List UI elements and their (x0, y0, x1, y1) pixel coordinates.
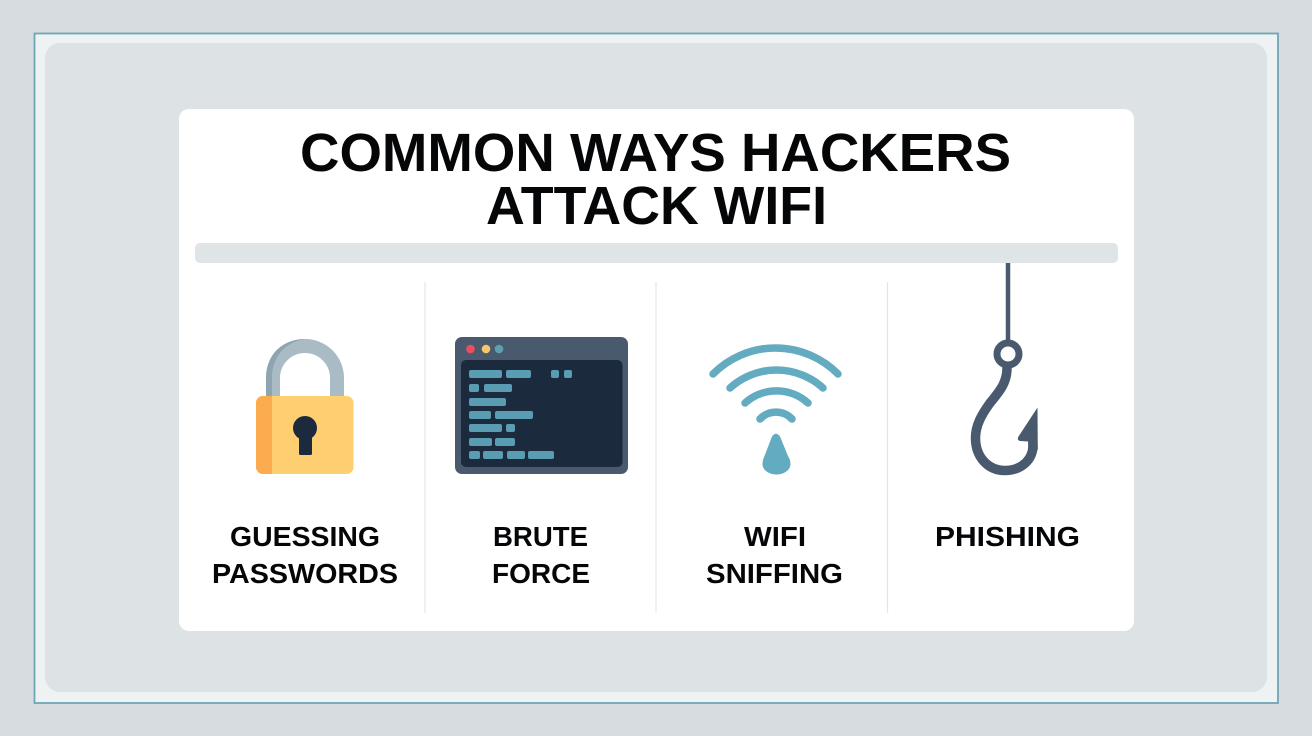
column: phishing (935, 263, 1080, 552)
label: brute force: FORCE (492, 558, 590, 589)
label: wifi sniffing (706, 521, 843, 589)
card background (179, 109, 1134, 631)
icon: fishing hook (976, 263, 1038, 470)
label: guessing passwords: GUESSING (230, 521, 380, 552)
icon: wifi signal with drop (713, 348, 838, 474)
column dividers (425, 282, 888, 613)
column: guessing passwords (212, 339, 398, 589)
label: brute force: BRUTE (493, 521, 588, 552)
column: wifi sniffing (706, 348, 843, 589)
label: guessing passwords: PASSWORDS (212, 558, 398, 589)
panel: white card (179, 109, 1134, 631)
title: COMMON WAYS HACKERS (300, 124, 1011, 183)
label: wifi sniffing: WIFI (744, 521, 806, 552)
title divider bar (195, 243, 1118, 263)
title (300, 124, 1011, 236)
column: brute force (455, 337, 628, 589)
title: ATTACK WIFI (486, 177, 827, 236)
label: guessing passwords (212, 521, 398, 589)
label: brute force (492, 521, 590, 589)
label: wifi sniffing: SNIFFING (706, 558, 843, 589)
label: phishing: PHISHING (935, 521, 1080, 552)
icon: terminal window (455, 337, 628, 474)
icon: padlock (256, 339, 354, 474)
